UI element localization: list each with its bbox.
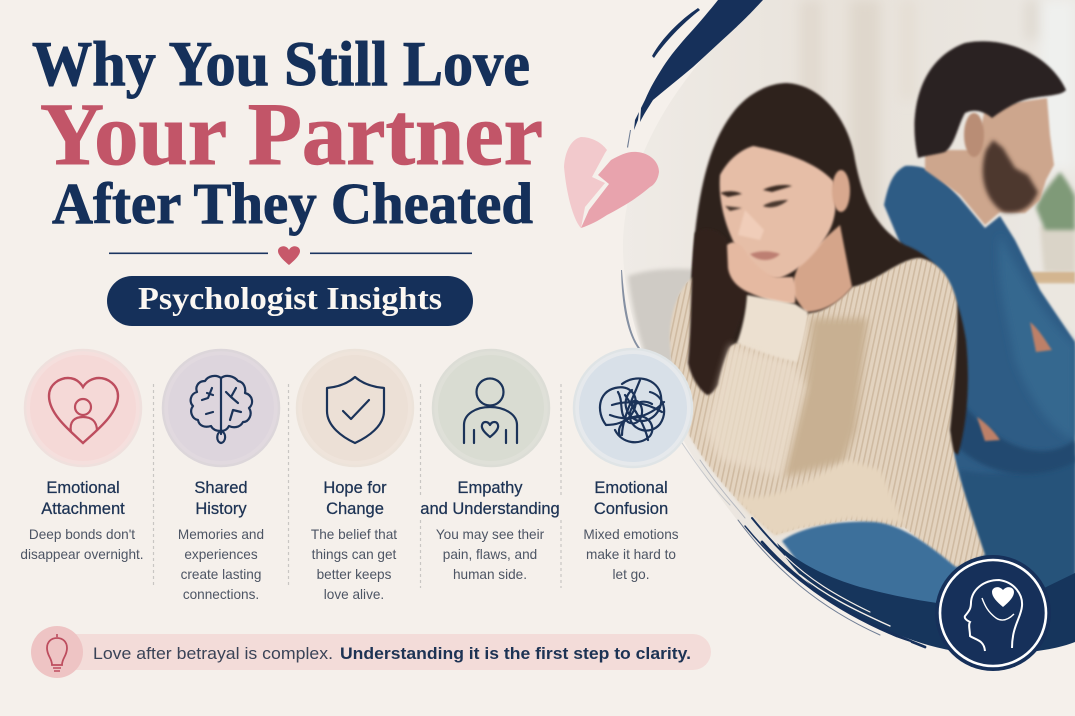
panel: shared history: experiences	[184, 547, 258, 562]
panel: shared history: create lasting	[181, 567, 261, 582]
woman: eyes, brows, nose and lips	[720, 185, 792, 260]
photo wall and curtains	[679, 0, 1075, 584]
panel: shared history	[163, 350, 279, 602]
woman: face	[720, 146, 836, 278]
woman: jeans	[780, 520, 958, 641]
panel: emotional confusion: let go.	[612, 567, 650, 582]
man: shirt and jeans	[884, 41, 1075, 600]
panel: emotional confusion: Confusion	[594, 500, 668, 518]
title divider with heart	[109, 246, 472, 265]
background plant and shelf	[1030, 170, 1075, 285]
panel: shared history: Memories and	[178, 527, 264, 542]
title: Your Partner	[40, 86, 543, 184]
title: After They Cheated	[52, 171, 533, 236]
woman: sweater cuff	[737, 295, 808, 362]
woman: long dark hair	[686, 83, 968, 455]
icon: heart with person	[25, 350, 141, 466]
panel: shared history: History	[195, 500, 247, 518]
icon: light bulb	[31, 626, 83, 678]
callout: love after betrayal	[31, 626, 711, 678]
woman: ear	[832, 170, 850, 212]
panel: empathy and understanding: human side.	[453, 567, 527, 582]
panel: emotional attachment: Attachment	[41, 500, 125, 518]
callout: love after betrayal: Understanding it is the first step to clarity.	[340, 645, 691, 663]
panel: empathy and understanding: Empathy	[457, 479, 523, 497]
badge: head with heart	[935, 555, 1051, 671]
badge: psychologist insights	[107, 276, 473, 326]
panel: empathy and understanding: You may see their	[436, 527, 545, 542]
badge: psychologist insights: Psychologist Insights	[138, 280, 442, 316]
icon: tangled scribble	[574, 349, 692, 467]
panel: emotional confusion	[574, 349, 692, 582]
panel: emotional confusion: make it hard to	[586, 547, 676, 562]
woman: neck	[790, 225, 852, 312]
panel: empathy and understanding: pain, flaws, and	[443, 547, 537, 562]
panel: emotional attachment: Deep bonds don't	[29, 527, 135, 542]
panel: hope for change: better keeps	[317, 567, 392, 582]
icon: broken heart	[564, 137, 659, 228]
panel: hope for change: Hope for	[323, 479, 387, 497]
icon: brain	[163, 350, 279, 466]
brush stroke: bottom navy bristles	[680, 440, 925, 647]
panel: hope for change: love alive.	[324, 587, 384, 602]
callout: love after betrayal: Love after betrayal is complex.	[93, 645, 333, 663]
woman: sweater torso shading	[782, 318, 868, 478]
panel: emotional attachment	[20, 350, 144, 562]
panel: emotional confusion: Emotional	[594, 479, 668, 497]
panel: hope for change: Change	[326, 500, 384, 518]
panel: shared history: connections.	[183, 587, 259, 602]
title	[32, 28, 543, 236]
panel: empathy and understanding: and Understanding	[420, 500, 560, 518]
woman: sweater body	[670, 258, 985, 568]
icon: shield with check	[297, 350, 413, 466]
woman: forearm highlight	[705, 345, 805, 477]
column dividers	[154, 384, 561, 588]
title: Why You Still Love	[32, 28, 530, 99]
woman: sleeve cuff across lap	[735, 460, 905, 535]
navy band at photo base	[777, 543, 1075, 660]
sofa back	[627, 268, 692, 362]
man: hair	[914, 41, 1066, 158]
man: ear	[964, 113, 984, 157]
panel: emotional attachment: Emotional	[46, 479, 120, 497]
panel: hope for change: things can get	[312, 547, 397, 562]
panel: emotional attachment: disappear overnight.	[20, 547, 144, 562]
panel: emotional confusion: Mixed emotions	[583, 527, 679, 542]
woman: sweater rib texture	[670, 258, 985, 568]
panel: hope for change: The belief that	[311, 527, 397, 542]
woman: hand on cheek	[727, 242, 796, 304]
icon: person with heart	[433, 350, 549, 466]
brush stroke: top navy arc	[621, 0, 763, 350]
panel: hope for change	[297, 350, 413, 602]
photo: couple sitting back to back	[620, 0, 1075, 660]
panel: shared history: Shared	[194, 479, 248, 497]
man: skin	[925, 98, 1054, 225]
brush stroke: pale streaks through navy	[785, 556, 915, 644]
woman: hair over shoulder	[686, 230, 733, 396]
panel: empathy and understanding	[420, 350, 560, 582]
man: beard	[983, 140, 1038, 213]
